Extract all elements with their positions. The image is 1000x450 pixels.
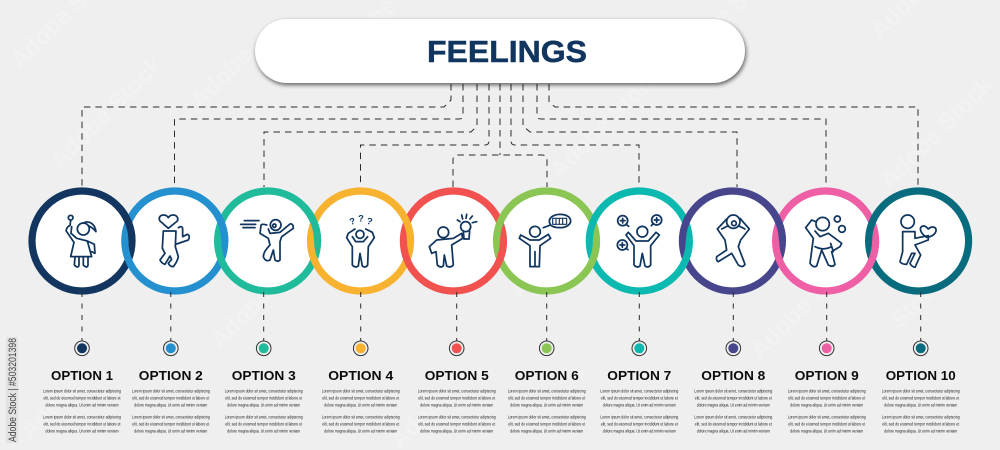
icon: sweating person with drops: [806, 216, 845, 267]
option 7 text and marker: OPTION 7: [607, 368, 671, 383]
option 2 text and marker: Lorem ipsum dolor sit amet, consectetur adipiscing: [132, 414, 210, 420]
option 2 text and marker: [132, 341, 210, 434]
infographic canvas: Adobe Stock: [45, 51, 168, 174]
option 8 text and marker: Lorem ipsum dolor sit amet, consectetur adipiscing: [694, 388, 773, 394]
option 9 text and marker: dolore magna aliqua. Ut enim ad minim veniam: [790, 402, 863, 408]
option 10 text and marker: dolore magna aliqua. Ut enim ad minim veniam: [884, 402, 957, 408]
dashed connectors from title to circles: [82, 84, 918, 187]
icon: person with light bulb idea: [429, 214, 477, 267]
infographic canvas: Adobe Stock: [205, 231, 328, 354]
option 4 text and marker: [322, 341, 400, 434]
option 10 text and marker: dolore magna aliqua. Ut enim ad minim veniam: [884, 428, 957, 434]
option 4 text and marker: dolore magna aliqua. Ut enim ad minim veniam: [324, 428, 397, 434]
option 9 text and marker: elit, sed do eiusmod tempor incididunt ut labore et: [788, 422, 866, 426]
title text: FEELINGS: [427, 34, 587, 69]
option 10 text and marker: Lorem ipsum dolor sit amet, consectetur adipiscing: [882, 388, 960, 394]
option 4 text and marker: Lorem ipsum dolor sit amet, consectetur adipiscing: [322, 414, 400, 420]
option 5 text and marker: OPTION 5: [425, 368, 489, 383]
infographic canvas: Adobe: [15, 372, 87, 444]
option 1 text and marker: dolore magna aliqua. Ut enim ad minim veniam: [46, 428, 119, 434]
icon: person running with speed lines: [241, 220, 293, 261]
option 3 text and marker: [225, 341, 303, 434]
infographic canvas: Adobe: [185, 42, 257, 114]
icon: person with battery speech bubble: [519, 214, 571, 267]
option 5 text and marker: Lorem ipsum dolor sit amet, consectetur adipiscing: [418, 414, 496, 420]
icon: confused person with question marks: ?: [358, 213, 364, 223]
option 5 text and marker: elit, sed do eiusmod tempor incididunt ut labore et: [418, 396, 496, 400]
option 5 text and marker: dolore magna aliqua. Ut enim ad minim veniam: [420, 402, 493, 408]
title pill: [255, 19, 745, 83]
option 5 text and marker: [418, 341, 496, 434]
option 10 text and marker: Lorem ipsum dolor sit amet, consectetur adipiscing: [882, 414, 960, 420]
infographic canvas: Adobe Stock: [875, 71, 998, 194]
white circle backgrounds: [32, 191, 969, 291]
option 4 text and marker: OPTION 4: [328, 368, 394, 383]
infographic canvas: Adobe Stock: [505, 181, 628, 304]
option 2 text and marker: OPTION 2: [139, 368, 203, 383]
option 9 text and marker: elit, sed do eiusmod tempor incididunt ut labore et: [788, 396, 866, 400]
icon: confused person with question marks: ?: [348, 216, 357, 227]
option 3 text and marker: elit, sed do eiusmod tempor incididunt ut labore et: [225, 422, 303, 426]
icon: girl waving with pigtail: [66, 215, 96, 267]
option 8 text and marker: dolore magna aliqua. Ut enim ad minim veniam: [697, 428, 770, 434]
option 1 text and marker: Lorem ipsum dolor sit amet, consectetur adipiscing: [43, 388, 121, 394]
option 3 text and marker: Lorem ipsum dolor sit amet, consectetur adipiscing: [225, 388, 303, 394]
option 7 text and marker: [600, 341, 679, 434]
option 8 text and marker: [694, 341, 773, 434]
option 8 text and marker: OPTION 8: [701, 368, 765, 383]
option 2 text and marker: dolore magna aliqua. Ut enim ad minim veniam: [134, 402, 207, 408]
option 2 text and marker: Lorem ipsum dolor sit amet, consectetur adipiscing: [132, 388, 210, 394]
option 7 text and marker: dolore magna aliqua. Ut enim ad minim veniam: [603, 428, 676, 434]
icon: person offering heart: [900, 215, 936, 267]
option 7 text and marker: dolore magna aliqua. Ut enim ad minim veniam: [603, 402, 676, 408]
option 7 text and marker: Lorem ipsum dolor sit amet, consectetur adipiscing: [600, 388, 679, 394]
option 1 text and marker: elit, sed do eiusmod tempor incididunt ut labore et: [44, 396, 121, 400]
option 1 text and marker: Lorem ipsum dolor sit amet, consectetur adipiscing: [43, 414, 121, 420]
option 8 text and marker: Lorem ipsum dolor sit amet, consectetur adipiscing: [694, 414, 773, 420]
option 8 text and marker: elit, sed do eiusmod tempor incididunt ut labore et: [695, 396, 772, 400]
option 4 text and marker: elit, sed do eiusmod tempor incididunt ut labore et: [322, 396, 400, 400]
option 4 text and marker: elit, sed do eiusmod tempor incididunt ut labore et: [322, 422, 400, 426]
option 6 text and marker: elit, sed do eiusmod tempor incididunt ut labore et: [508, 422, 586, 426]
option 1 text and marker: dolore magna aliqua. Ut enim ad minim veniam: [46, 402, 119, 408]
option 3 text and marker: dolore magna aliqua. Ut enim ad minim veniam: [227, 428, 300, 434]
option 1 text and marker: [43, 341, 121, 434]
option 6 text and marker: Lorem ipsum dolor sit amet, consectetur adipiscing: [508, 414, 586, 420]
option 5 text and marker: dolore magna aliqua. Ut enim ad minim veniam: [420, 428, 493, 434]
option 2 text and marker: elit, sed do eiusmod tempor incididunt ut labore et: [132, 422, 210, 426]
option 6 text and marker: dolore magna aliqua. Ut enim ad minim veniam: [510, 402, 583, 408]
option 3 text and marker: OPTION 3: [232, 368, 296, 383]
option 1 text and marker: OPTION 1: [51, 368, 113, 383]
option 10 text and marker: elit, sed do eiusmod tempor incididunt ut labore et: [882, 396, 960, 400]
option 9 text and marker: Lorem ipsum dolor sit amet, consectetur adipiscing: [788, 414, 866, 420]
option 6 text and marker: dolore magna aliqua. Ut enim ad minim veniam: [510, 428, 583, 434]
infographic canvas: Adobe Stock: [745, 241, 868, 364]
option 4 text and marker: dolore magna aliqua. Ut enim ad minim veniam: [324, 402, 397, 408]
option 1 text and marker: elit, sed do eiusmod tempor incididunt ut labore et: [44, 422, 121, 426]
option 8 text and marker: dolore magna aliqua. Ut enim ad minim veniam: [697, 402, 770, 408]
icon: person jumping with hands behind head: [717, 215, 749, 267]
infographic canvas: Stock: [885, 268, 951, 334]
option 3 text and marker: Lorem ipsum dolor sit amet, consectetur adipiscing: [225, 414, 303, 420]
option 6 text and marker: Lorem ipsum dolor sit amet, consectetur adipiscing: [508, 388, 586, 394]
option 2 text and marker: dolore magna aliqua. Ut enim ad minim veniam: [134, 428, 207, 434]
option 10 text and marker: elit, sed do eiusmod tempor incididunt ut labore et: [882, 422, 960, 426]
option 9 text and marker: [788, 341, 866, 434]
icon: confused person with question marks: [347, 213, 374, 267]
option 8 text and marker: elit, sed do eiusmod tempor incididunt ut labore et: [695, 422, 772, 426]
vertical stock credit: Adobe Stock | #503201398: [7, 338, 19, 442]
option 6 text and marker: [508, 341, 586, 434]
option 9 text and marker: Lorem ipsum dolor sit amet, consectetur adipiscing: [788, 388, 866, 394]
lower connectors: [82, 292, 921, 341]
infographic canvas: Adobe Stock: [545, 61, 668, 184]
interlocked option rings: [32, 191, 969, 291]
option 6 text and marker: OPTION 6: [515, 368, 579, 383]
option 3 text and marker: elit, sed do eiusmod tempor incididunt ut labore et: [225, 396, 303, 400]
option 7 text and marker: Lorem ipsum dolor sit amet, consectetur adipiscing: [600, 414, 679, 420]
option 5 text and marker: elit, sed do eiusmod tempor incididunt ut labore et: [418, 422, 496, 426]
option 7 text and marker: elit, sed do eiusmod tempor incididunt ut labore et: [601, 422, 678, 426]
option 9 text and marker: dolore magna aliqua. Ut enim ad minim veniam: [790, 428, 863, 434]
icon: confused person with question marks: ?: [366, 216, 374, 227]
option 7 text and marker: elit, sed do eiusmod tempor incididunt ut labore et: [601, 396, 678, 400]
option 4 text and marker: Lorem ipsum dolor sit amet, consectetur adipiscing: [322, 388, 400, 394]
option 2 text and marker: elit, sed do eiusmod tempor incididunt ut labore et: [132, 396, 210, 400]
icon: dancing person with heart: [159, 215, 189, 267]
option 5 text and marker: Lorem ipsum dolor sit amet, consectetur adipiscing: [418, 388, 496, 394]
option 10 text and marker: [882, 341, 960, 434]
option 10 text and marker: OPTION 10: [886, 368, 956, 383]
icon: cheering person with plus bubbles: [617, 215, 662, 267]
option 9 text and marker: OPTION 9: [795, 368, 859, 383]
option 3 text and marker: dolore magna aliqua. Ut enim ad minim veniam: [227, 402, 300, 408]
option 6 text and marker: elit, sed do eiusmod tempor incididunt ut labore et: [508, 396, 586, 400]
